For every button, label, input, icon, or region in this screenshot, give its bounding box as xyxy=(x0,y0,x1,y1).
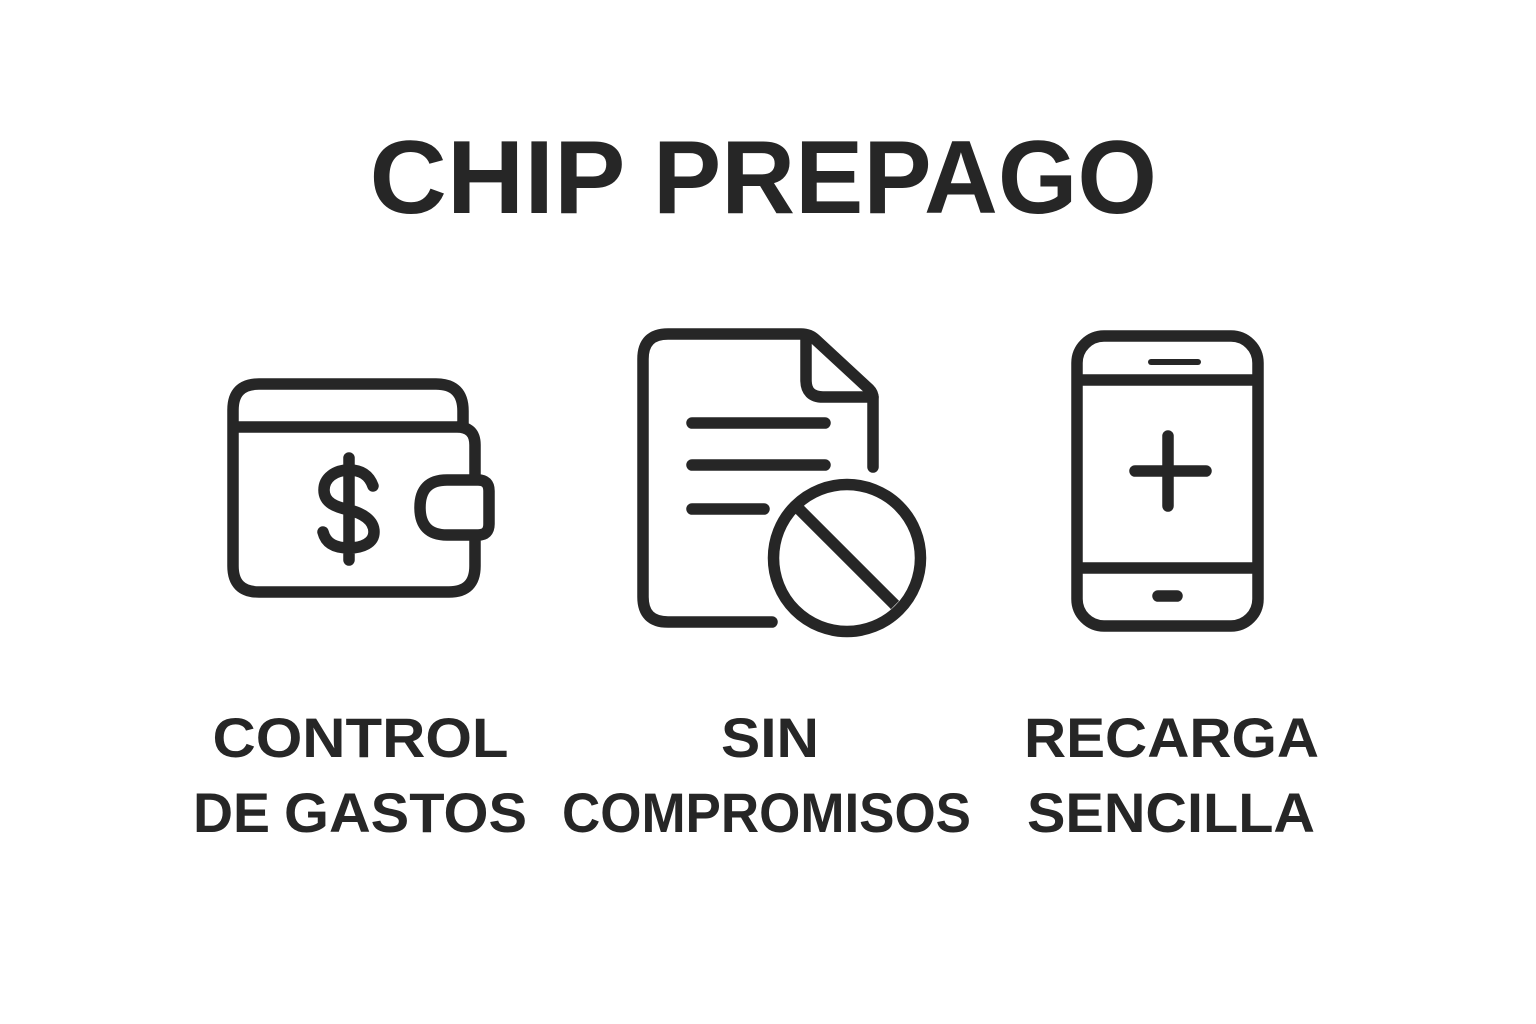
label: control de gastos: CONTROL xyxy=(212,706,508,769)
icon: phone with plus xyxy=(1077,336,1258,626)
wallet clasp xyxy=(420,480,489,535)
prohibition slash xyxy=(798,508,895,605)
folded corner xyxy=(806,338,873,397)
icon: wallet xyxy=(233,384,489,592)
label: recarga sencilla xyxy=(1024,706,1319,844)
label: recarga sencilla: SENCILLA xyxy=(1027,781,1315,844)
speaker xyxy=(1151,359,1198,365)
label: sin compromisos xyxy=(562,706,971,844)
dollar sign xyxy=(323,458,374,560)
label: control de gastos: GASTOS xyxy=(284,781,527,844)
screen bars xyxy=(1077,380,1258,568)
home button xyxy=(1158,590,1177,602)
label: recarga sencilla: RECARGA xyxy=(1024,706,1319,769)
document text lines xyxy=(692,423,825,509)
phone outline xyxy=(1077,336,1258,626)
label: sin compromisos: SIN xyxy=(721,706,819,769)
label: control de gastos xyxy=(193,706,527,844)
label: sin compromisos: COMPROMISOS xyxy=(562,781,971,844)
title: CHIP xyxy=(370,120,626,236)
title: PREPAGO xyxy=(653,120,1157,236)
label: control de gastos: DE xyxy=(193,781,270,844)
prohibition circle xyxy=(774,484,920,632)
document outline xyxy=(643,334,873,622)
title xyxy=(370,120,1157,236)
wallet body xyxy=(233,384,475,592)
icon: document with prohibition sign xyxy=(643,334,920,632)
plus sign xyxy=(1135,436,1206,506)
